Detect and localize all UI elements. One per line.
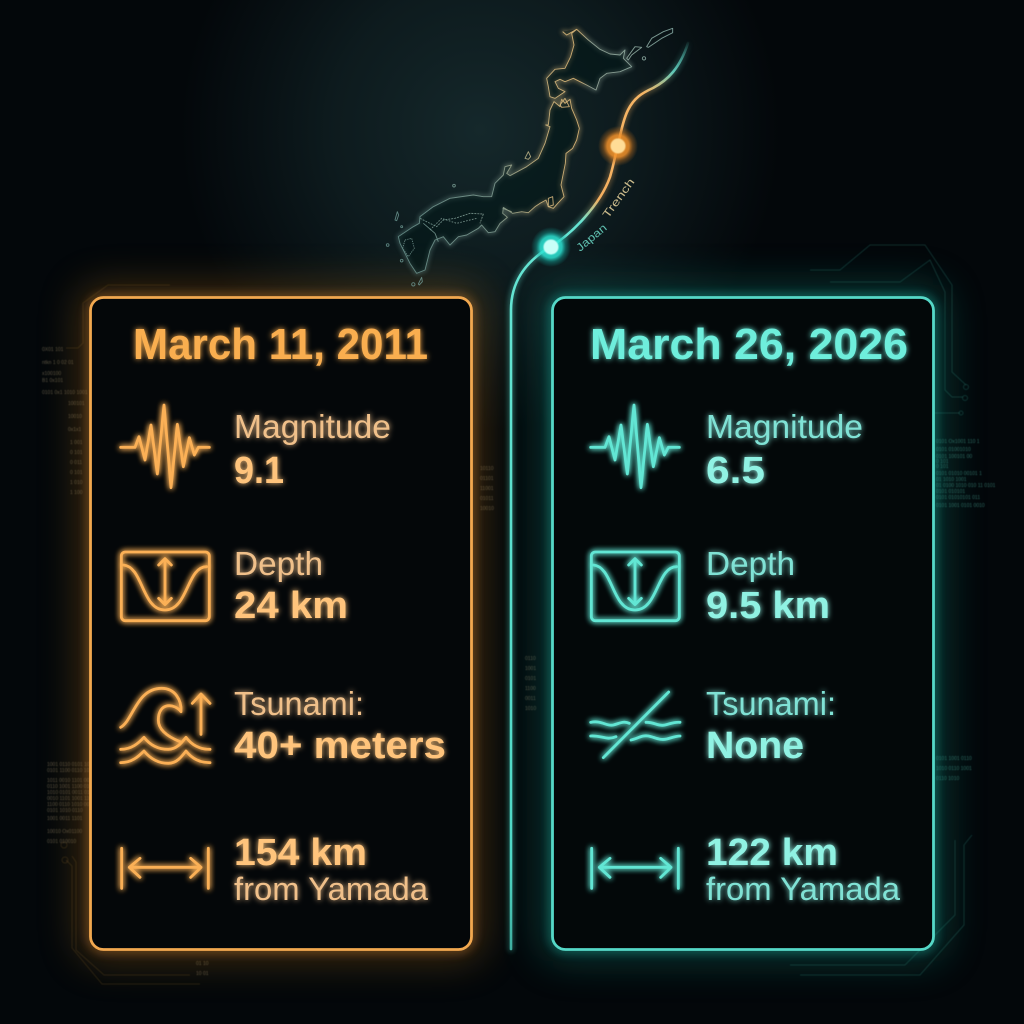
decorative circuit traces and data text left: 01011 xyxy=(480,496,494,502)
decorative circuit traces and data text left: 0 101 xyxy=(70,450,83,456)
map of Japan xyxy=(386,28,673,286)
trench label: Japan xyxy=(574,222,610,254)
tsunami stat xyxy=(234,685,446,767)
decorative circuit traces and data text right: 0101 1001 0110 xyxy=(936,756,972,762)
decorative circuit traces and data text left: 1010 0101 0011 0110 xyxy=(47,790,95,796)
decorative circuit traces and data text left: 0101 xyxy=(525,676,536,682)
decorative circuit traces and data text left: 01101 xyxy=(480,476,494,482)
decorative circuit traces and data text left: B1 0x101 xyxy=(42,378,63,384)
decorative circuit traces and data text left: 10 01 xyxy=(196,971,209,977)
decorative circuit traces and data text left: 1001 xyxy=(525,666,536,672)
decorative circuit traces and data text left: 100101 xyxy=(68,401,85,407)
decorative circuit traces and data text right: 0101 100101 00 xyxy=(936,454,972,460)
panel: March 26, 2026 xyxy=(552,298,934,950)
Hokkaido xyxy=(547,29,632,98)
decorative circuit traces and data text left: 0101 1010 0110 xyxy=(47,808,83,814)
magnitude stat xyxy=(706,408,863,492)
trench line xyxy=(511,43,688,949)
decorative circuit traces and data text left: 1010 xyxy=(525,706,536,712)
marker: 2011 epicentre xyxy=(598,126,638,166)
panel: March 11, 2011 xyxy=(90,298,472,950)
decorative circuit traces and data text left: 10010 xyxy=(68,414,82,420)
decorative circuit traces and data text left: 1 001 xyxy=(70,440,83,446)
trench label xyxy=(574,176,637,254)
decorative circuit traces and data text right: 0101 010101 xyxy=(936,489,965,495)
tsunami stat: 40+ meters xyxy=(234,725,446,767)
distance stat: from Yamada xyxy=(706,871,900,907)
decorative circuit traces and data text left: 0010 1101 1001 1100 xyxy=(47,796,95,802)
Honshu, Shikoku and Kyushu xyxy=(398,99,579,273)
decorative circuit traces and data text left: 1001 0110 0101 1011 xyxy=(47,762,95,768)
panel glows xyxy=(78,285,946,961)
decorative circuit traces and data text right: 0101 01010101 011 xyxy=(936,495,980,501)
marker: 2026 epicentre xyxy=(531,227,571,267)
depth stat: 9.5 km xyxy=(706,585,830,627)
heading: 2026: March 26, 2026 xyxy=(590,320,908,369)
depth stat xyxy=(234,545,348,627)
decorative circuit traces and data text left: 0x1x1 xyxy=(68,427,82,433)
decorative circuit traces and data text right: 0 101 xyxy=(936,464,949,470)
tsunami stat xyxy=(706,685,836,767)
decorative circuit traces and data text left: 0101 1100 0110 1010 xyxy=(47,768,95,774)
decorative circuit traces and data text left: 1 010 xyxy=(70,480,83,486)
distance stat xyxy=(234,832,428,907)
decorative circuit traces and data text left: x100100 xyxy=(42,371,61,377)
magnitude stat xyxy=(234,408,391,492)
magnitude stat: Magnitude xyxy=(706,408,863,445)
decorative circuit traces and data text left: 0011 xyxy=(525,696,536,702)
magnitude stat: 9.1 xyxy=(234,450,284,492)
decorative circuit traces and data text right: 0101 01001010 xyxy=(936,447,971,453)
icon: tsunami xyxy=(121,688,210,763)
magnitude stat: 6.5 xyxy=(706,450,765,492)
decorative circuit traces and data text left: 1011 0010 1101 0011 xyxy=(47,778,95,784)
icon: distance xyxy=(122,848,208,888)
decorative circuit traces and data text left: ntkn 1 0 02 01 xyxy=(42,360,74,366)
decorative circuit traces and data text left: 0101 0x1 1010 1001 xyxy=(42,390,88,396)
decorative circuit traces and data text left: 11001 xyxy=(480,486,494,492)
decorative circuit traces and data text left: 0 011 xyxy=(70,460,82,466)
decorative circuit traces and data text left: 1100 xyxy=(525,686,536,692)
decorative circuit traces and data text left: 10010 xyxy=(480,506,494,512)
decorative circuit traces and data text right: 0101 Ox1001 110 1 xyxy=(936,439,980,445)
magnitude stat: Magnitude xyxy=(234,408,391,445)
tsunami stat: Tsunami: xyxy=(706,685,836,722)
icon: seismograph xyxy=(591,405,679,488)
depth stat xyxy=(706,545,830,627)
tsunami stat: Tsunami: xyxy=(234,685,364,722)
decorative circuit traces and data text left: 01 10 xyxy=(196,961,209,967)
icon: seismograph xyxy=(121,405,209,488)
decorative circuit traces and data text left: 0110 1001 1100 0101 xyxy=(47,784,95,790)
icon: depth xyxy=(121,552,209,621)
Kuril islands xyxy=(647,28,673,47)
decorative circuit traces and data text right: 01 1010 1001 xyxy=(936,477,967,483)
decorative circuit traces and data text left: 0X01 101 xyxy=(42,347,64,353)
decorative circuit traces and data text left: 0110 xyxy=(525,656,536,662)
decorative circuit traces and data text right: 0110 1010 xyxy=(936,776,959,782)
trench label: Trench xyxy=(601,176,637,221)
decorative circuit traces and data text right: 0 101 xyxy=(936,459,949,465)
decorative circuit traces and data text left: 1100 0110 1010 0011 xyxy=(47,802,95,808)
distance stat: 122 km xyxy=(706,832,838,874)
tsunami stat: None xyxy=(706,725,804,767)
distance stat: from Yamada xyxy=(234,871,428,907)
distance stat xyxy=(706,832,900,907)
decorative circuit traces and data text left xyxy=(42,285,536,984)
heading: 2011: March 11, 2011 xyxy=(133,320,428,369)
distance stat: 154 km xyxy=(234,832,367,874)
decorative circuit traces and data text right: 01 0100 1010 010 11 0101 xyxy=(936,483,996,489)
depth stat: Depth xyxy=(234,545,323,582)
decorative circuit traces and data text left: 10010 Ox01100 xyxy=(47,829,82,835)
decorative circuit traces and data text left: 1001 0011 1101 xyxy=(47,816,83,822)
decorative circuit traces and data text left: 0101 010010 xyxy=(47,839,76,845)
decorative circuit traces and data text left: 1 100 xyxy=(70,490,83,496)
depth stat: 24 km xyxy=(234,585,348,627)
icon: distance xyxy=(592,848,678,888)
icon: depth xyxy=(591,552,679,621)
icon: no tsunami xyxy=(591,692,680,758)
depth stat: Depth xyxy=(706,545,795,582)
decorative circuit traces and data text right: 0101 01010 00101 1 xyxy=(936,471,982,477)
decorative circuit traces and data text left: 10110 xyxy=(480,466,494,472)
decorative circuit traces and data text right: 0101 1001 0101 0010 xyxy=(936,503,985,509)
decorative circuit traces and data text right: 1010 0110 1001 xyxy=(936,766,972,772)
decorative circuit traces and data text right xyxy=(790,245,996,975)
decorative circuit traces and data text left: 0 101 xyxy=(70,470,83,476)
